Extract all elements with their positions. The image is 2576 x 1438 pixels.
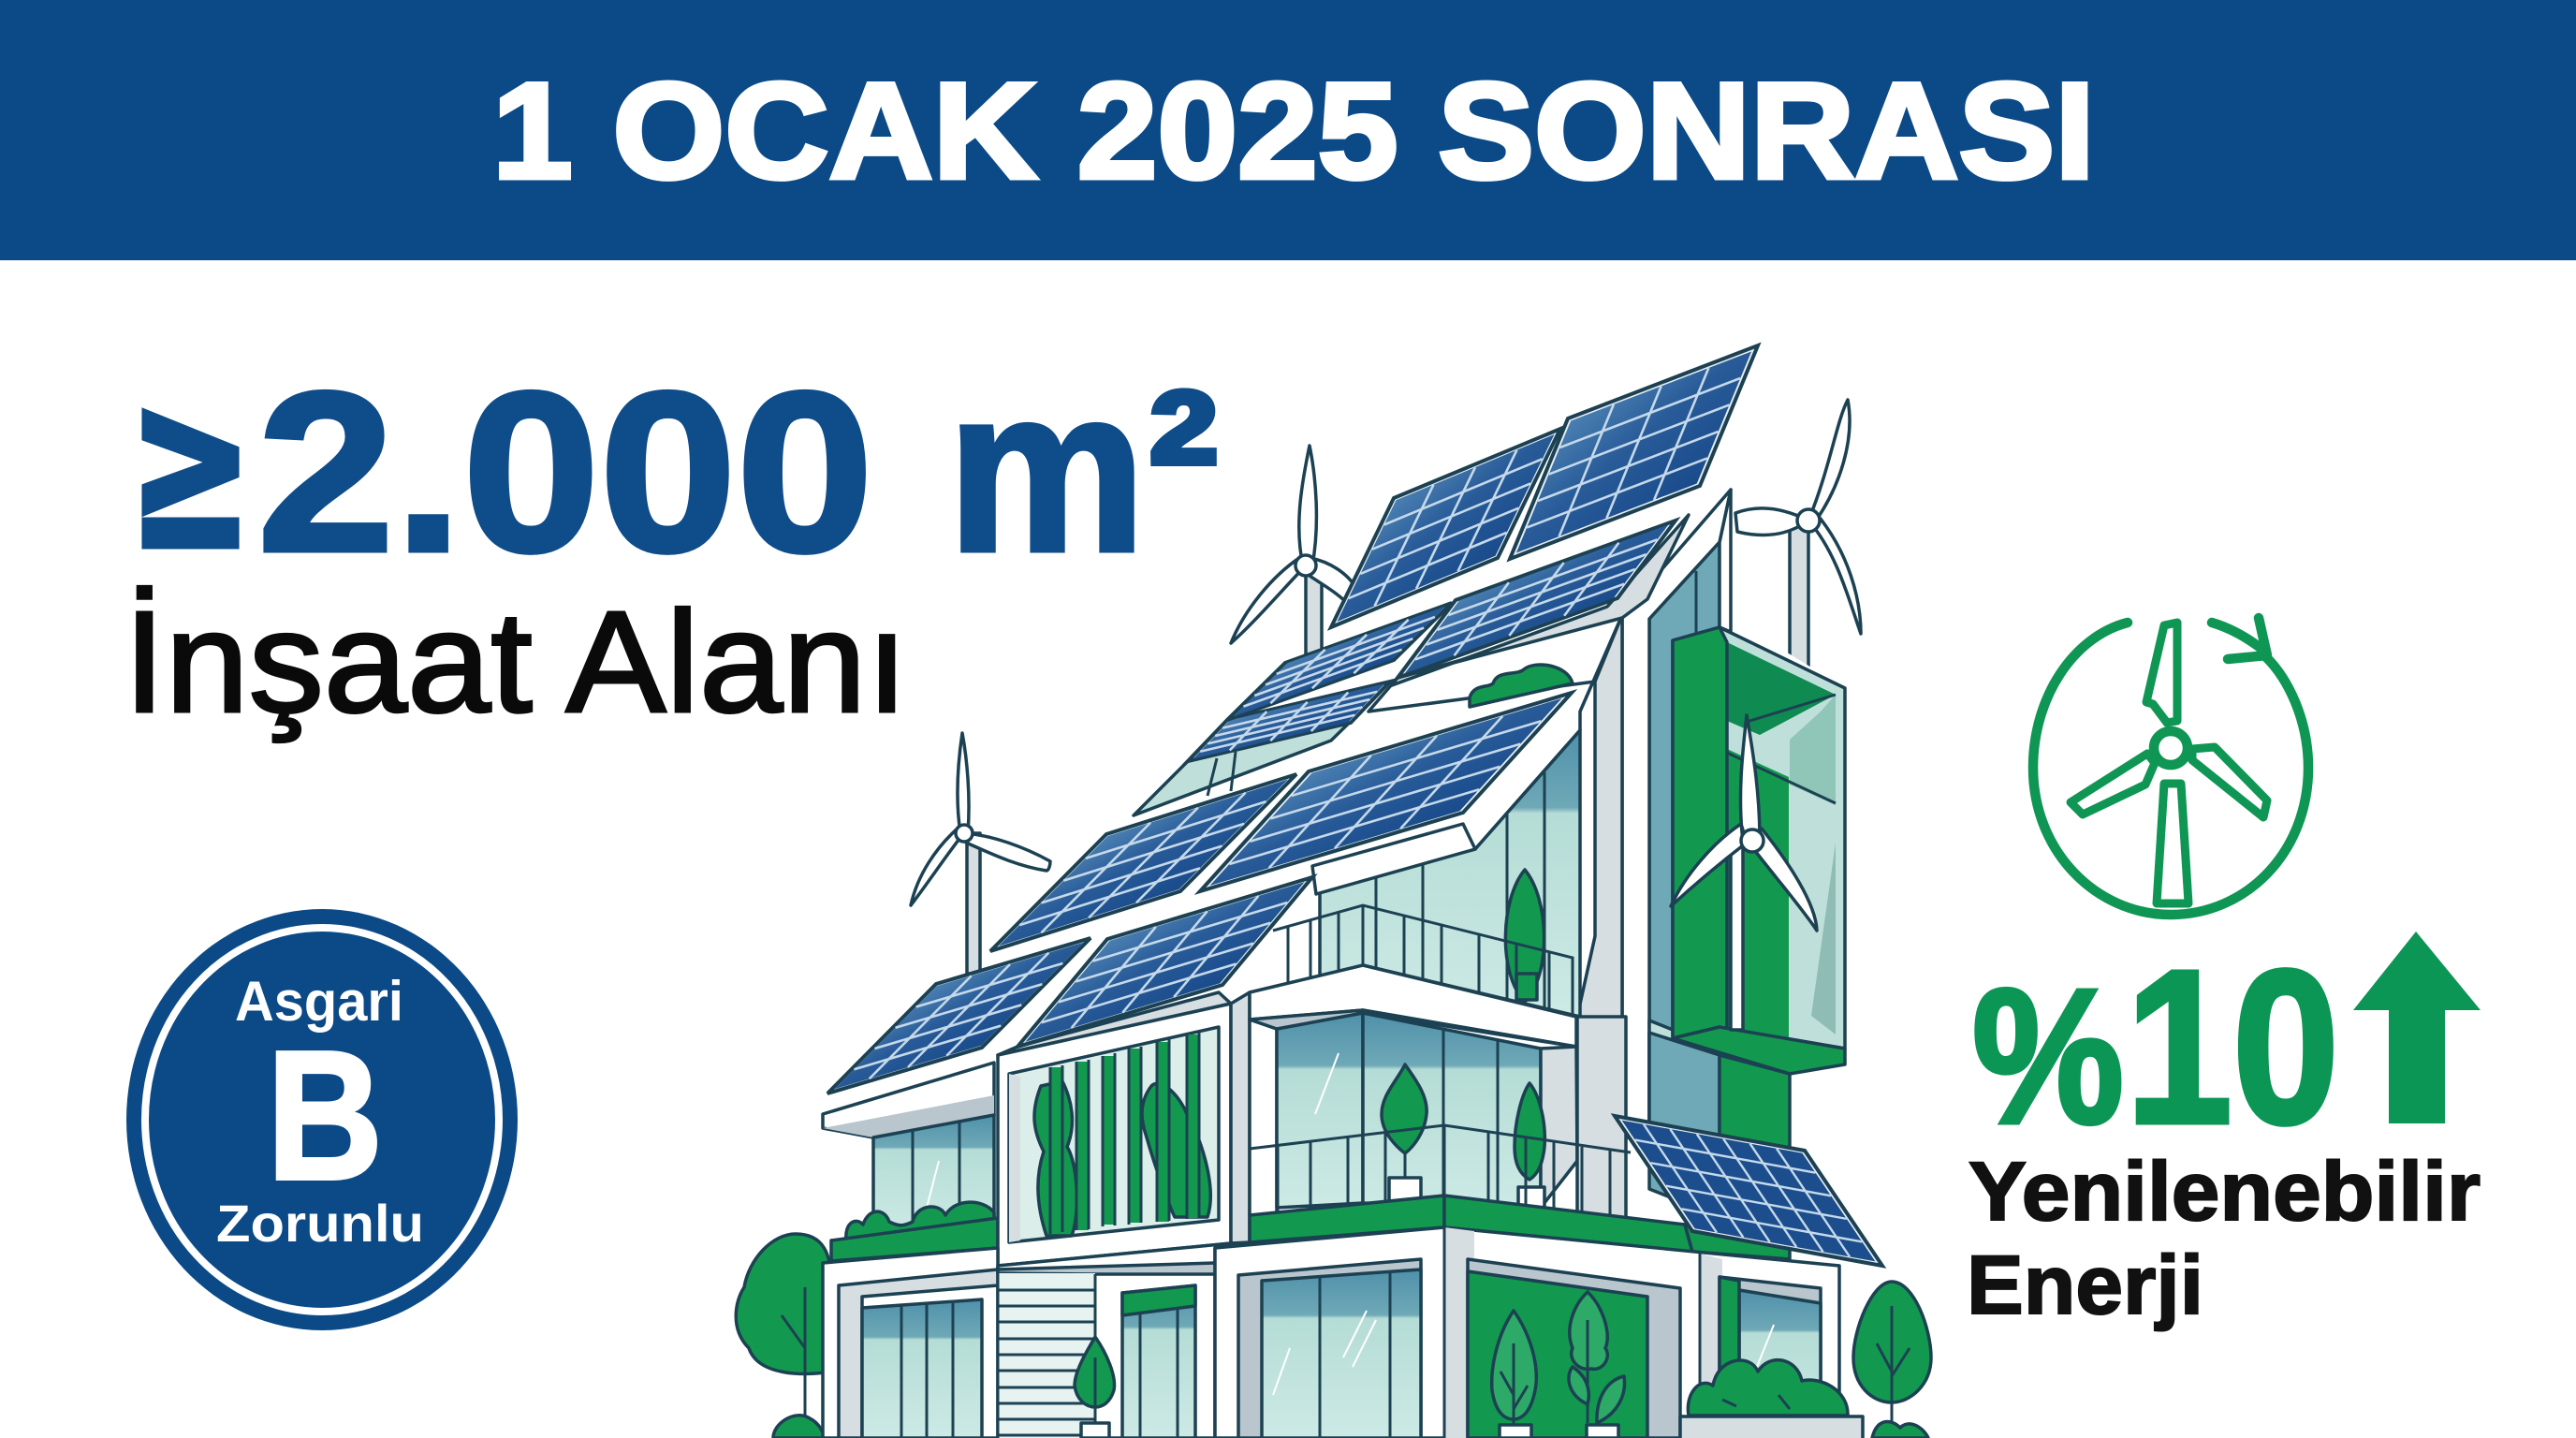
gable glass bbox=[1320, 730, 1580, 1017]
wind turbine: back left bbox=[1231, 446, 1357, 659]
header banner bbox=[0, 0, 2576, 260]
window A bbox=[1238, 1259, 1421, 1438]
top balcony railing bbox=[1273, 905, 1573, 1017]
green recessed window bbox=[1468, 1259, 1680, 1438]
green balcony floor bbox=[1250, 1196, 1444, 1242]
wind turbine: back right bbox=[1735, 400, 1861, 682]
area caption: İnşaat Alanı bbox=[124, 581, 908, 742]
building structure backing bbox=[823, 490, 1845, 1438]
wind turbine: front of box bbox=[1671, 715, 1817, 1030]
renewable caption bbox=[1967, 1144, 2481, 1331]
arrow up bbox=[2353, 932, 2481, 1123]
renewable caption: Yenilenebilir bbox=[1969, 1144, 2481, 1238]
main center second floor bbox=[1231, 965, 1790, 1259]
badge: minimum B class: Asgari bbox=[235, 970, 403, 1033]
balcony potted plants bbox=[1382, 1064, 1544, 1208]
illustration: green building with solar panels and wind turbines bbox=[736, 345, 1931, 1438]
stair-side potted tree bbox=[1075, 1337, 1114, 1438]
right ground wall bbox=[1215, 1227, 1839, 1438]
planter bushes bbox=[846, 1202, 994, 1245]
title: 1 OCAK 2025 SONRASI bbox=[492, 54, 2095, 207]
eave under panels bbox=[1312, 824, 1475, 894]
upper white gable wall bbox=[1316, 615, 1622, 1017]
percentage figure: 10 bbox=[2126, 924, 2339, 1169]
door bbox=[1122, 1285, 1195, 1438]
solar panel group: roof bbox=[827, 345, 1758, 1093]
staircase bbox=[998, 1273, 1095, 1438]
area figure: ≥ bbox=[127, 330, 254, 602]
renewable caption: Enerji bbox=[1967, 1238, 2203, 1331]
area figure: ² bbox=[1148, 347, 1219, 578]
right window bbox=[1720, 1277, 1821, 1438]
area figure: m bbox=[947, 339, 1146, 600]
vertical green screen bbox=[998, 1004, 1231, 1266]
balcony railing bbox=[1250, 1125, 1631, 1223]
green window plants bbox=[1492, 1292, 1625, 1438]
badge: minimum B class: Zorunlu bbox=[216, 1194, 424, 1253]
right bush in planter bbox=[1680, 1360, 1863, 1438]
stat: minimum construction area bbox=[124, 330, 1219, 742]
intermediate panel bbox=[1188, 682, 1390, 761]
percentage figure: % bbox=[1972, 949, 2124, 1164]
stat: 10 percent renewable energy bbox=[1967, 924, 2481, 1331]
percentage figure bbox=[1972, 924, 2339, 1169]
left big tree bbox=[736, 1234, 831, 1438]
skylight glass bbox=[1134, 698, 1374, 815]
roof garden bushes bbox=[1470, 665, 1573, 707]
centre wall bbox=[998, 1243, 1231, 1438]
area figure bbox=[127, 330, 1219, 602]
row panels bbox=[1510, 345, 1758, 559]
icon: wind turbine with circular arrow bbox=[2033, 618, 2308, 915]
area figure: 2.000 bbox=[257, 345, 873, 599]
wind turbine: far left bbox=[911, 733, 1050, 974]
left wing upper floor bbox=[823, 1063, 998, 1261]
green cantilever box bbox=[1649, 627, 1845, 1250]
ground floor bbox=[823, 1227, 1839, 1438]
left ground wing bbox=[823, 1248, 998, 1438]
right tree bbox=[1853, 1282, 1931, 1438]
tower right glass bbox=[1577, 490, 1731, 1137]
badge: minimum B class: B bbox=[267, 1013, 383, 1218]
potted tree on top balcony bbox=[1505, 870, 1544, 1002]
balcony slab bbox=[1250, 965, 1576, 1047]
badge: minimum B class bbox=[126, 909, 518, 1330]
small solar panel bbox=[1615, 1116, 1882, 1266]
